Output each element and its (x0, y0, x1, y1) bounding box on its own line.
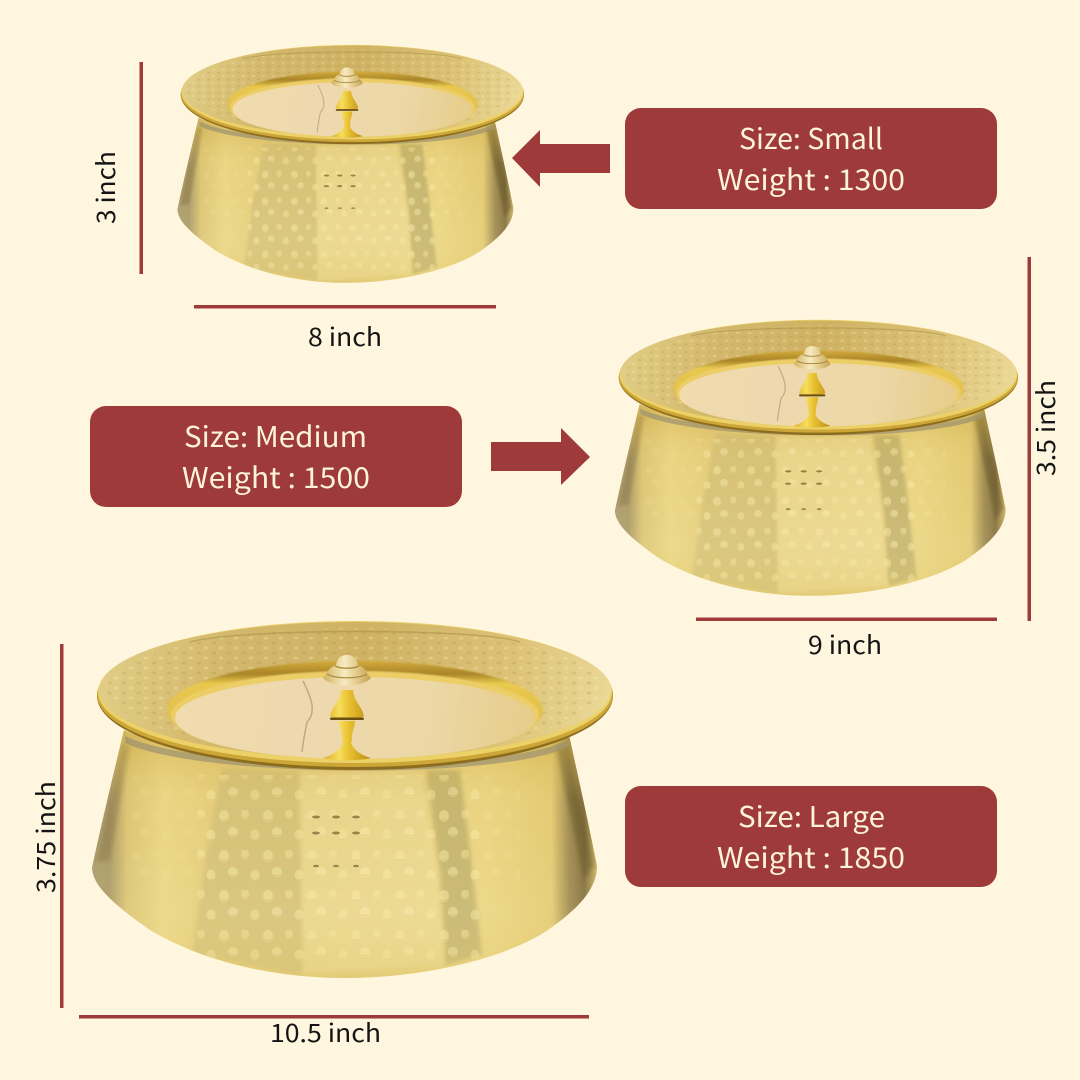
callout: medium (90, 406, 462, 507)
callout: large: Size: Large (738, 795, 885, 836)
callout: small: Weight : 1300 (717, 158, 905, 199)
small pot image (177, 45, 524, 284)
large pot image (92, 621, 613, 980)
large width dimension: 10.5 inch (270, 1014, 381, 1050)
small width dimension (194, 305, 496, 354)
callout: large: Weight : 1850 (717, 836, 905, 877)
arrow pointing to medium pot (491, 428, 590, 485)
medium height dimension (1027, 257, 1063, 621)
medium width dimension (696, 618, 997, 662)
small height dimension: 3 inch (87, 151, 123, 224)
medium height dimension: 3.5 inch (1027, 380, 1063, 476)
large height dimension: 3.75 inch (27, 781, 63, 893)
callout: large (625, 786, 997, 887)
callout: small (625, 108, 997, 209)
large height dimension (27, 644, 64, 1008)
large width dimension (79, 1014, 589, 1050)
small height dimension (87, 62, 143, 274)
callout: medium: Size: Medium (184, 415, 367, 456)
small width dimension: 8 inch (308, 318, 382, 354)
arrow pointing to small pot (512, 130, 610, 187)
callout: medium: Weight : 1500 (182, 456, 370, 497)
medium width dimension: 9 inch (808, 626, 882, 662)
callout: small: Size: Small (739, 117, 883, 158)
medium pot image (615, 320, 1018, 597)
